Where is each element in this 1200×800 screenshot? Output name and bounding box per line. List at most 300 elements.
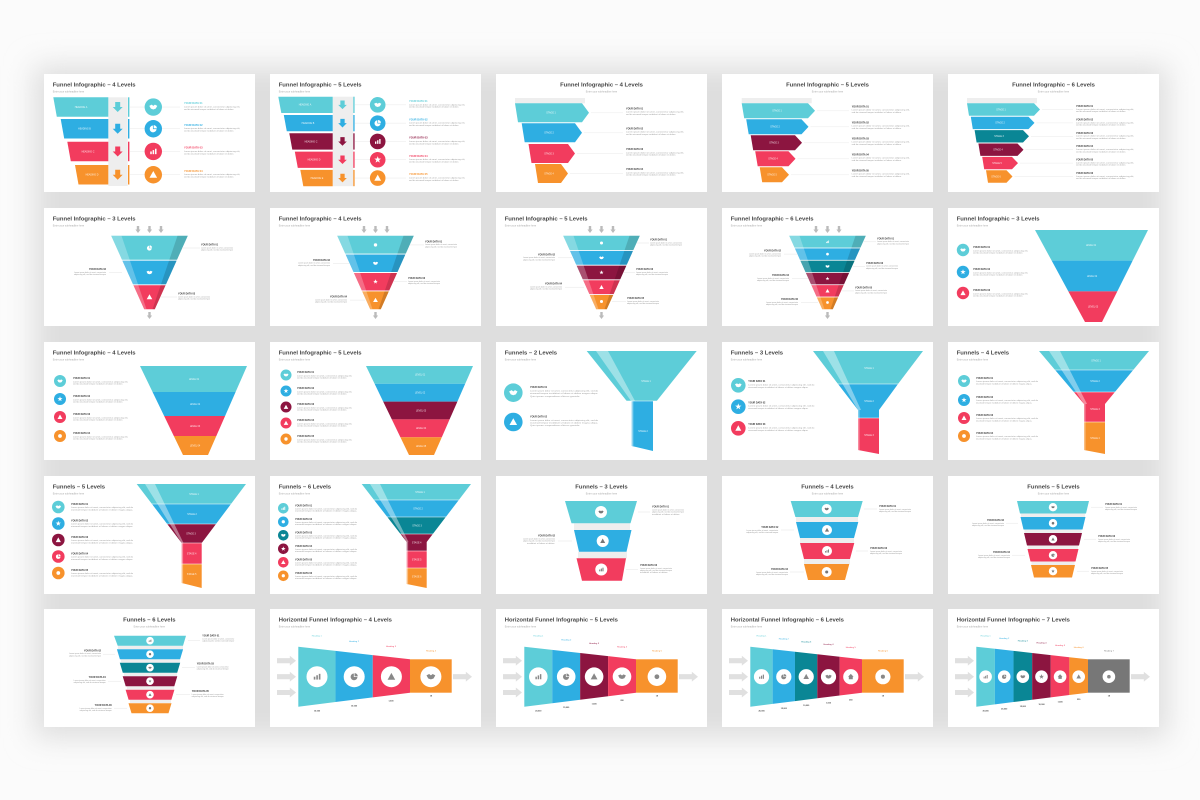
data labels: Lorem ipsum dolor sit amet, consectetur: [749, 252, 781, 255]
headings and values: Heading 2: [779, 638, 790, 640]
data items: sed do eiusmod tempor incididunt ut labore et dolore.: [184, 152, 235, 155]
list items: sed do eiusmod tempor incididunt ut labore et dolore.: [297, 441, 348, 444]
data items: YOUR DATA 03: [1076, 132, 1094, 135]
funnel bars: HEADING C: [82, 150, 95, 153]
data labels: adipiscing elit, sed do eiusmod tempor: [1091, 572, 1123, 575]
funnel bars: HEADING E: [311, 177, 324, 180]
list items: YOUR DATA 03: [973, 289, 991, 292]
headings and values: Heading 1: [757, 636, 767, 638]
data labels: [746, 505, 911, 576]
funnel: LEVEL 04: [416, 428, 427, 430]
list items: YOUR DATA 02: [748, 401, 766, 404]
list items: Lorem ipsum dolor sit amet, consectetur adipiscing elit,: [973, 292, 1029, 295]
subtitle: Enter your subheadline here: [586, 492, 618, 495]
list items: Lorem ipsum dolor sit amet, consectetur adipiscing elit, sed do: [71, 506, 133, 509]
data labels: YOUR DATA 05: [855, 286, 873, 289]
list items: [957, 244, 1029, 299]
data items: Lorem ipsum dolor sit amet, consectetur adipiscing elit,: [1076, 175, 1135, 178]
data labels: Lorem ipsum dolor sit amet, consectetur: [972, 522, 1004, 525]
data items: Lorem ipsum dolor sit amet, consectetur adipiscing elit,: [1076, 162, 1135, 164]
slide: Funnel Infographic 4 levels arrow bars: [496, 74, 707, 192]
funnel bars: HEADING A: [299, 104, 312, 107]
list items: Lorem ipsum dolor sit amet, consectetur adipiscing elit, sed do: [295, 521, 357, 524]
data items: sed do eiusmod tempor incididunt ut labore et dolore.: [409, 161, 460, 164]
data labels: Lorem ipsum dolor sit amet, consectetur: [80, 707, 112, 710]
funnel: STAGE 1: [1091, 360, 1101, 362]
title: Funnel Infographic – 5 Levels: [786, 83, 870, 89]
list items: sed do eiusmod tempor incididunt ut labore et dolore.: [297, 409, 348, 412]
headings and values: Heading 3: [801, 641, 812, 643]
list items: eiusmod tempor incididunt ut labore et dolore magna aliqua.: [976, 402, 1033, 405]
headings and values: Heading 7: [1104, 651, 1115, 653]
data labels: YOUR DATA 01: [879, 505, 897, 508]
data labels: adipiscing elit, sed do eiusmod tempor: [69, 654, 101, 657]
list items: YOUR DATA 01: [73, 377, 91, 380]
list items: sed do eiusmod tempor incididunt ut labore et dolore.: [297, 425, 348, 428]
list items: sed do eiusmod tempor incididunt ut labore et dolore.: [73, 401, 124, 404]
data labels: Lorem ipsum dolor sit amet, consectetur: [627, 300, 659, 303]
slide: list with funnel 3 levels: [948, 208, 1159, 326]
data items: Lorem ipsum dolor sit amet, consectetur adipiscing elit,: [184, 150, 241, 153]
slide: Horizontal Funnel 7 levels: [948, 609, 1159, 727]
slide: Funnel Infographic 4 levels with arrows: [44, 74, 255, 192]
slide: Funnels 3 levels: [722, 342, 933, 460]
data items: sed do eiusmod tempor incididunt ut labore et dolore.: [1076, 137, 1127, 140]
data labels: YOUR DATA 02: [764, 250, 782, 253]
subtitle: Enter your subheadline here: [134, 625, 166, 628]
headings and values: Heading 3: [1018, 640, 1029, 642]
list items: Lorem ipsum dolor sit amet, consectetur adipiscing elit, sed do: [71, 523, 133, 526]
data items: sed do eiusmod tempor incididunt ut labore et dolore.: [1076, 110, 1127, 113]
funnel arrow bars: [742, 98, 815, 182]
funnel: LEVEL 01: [415, 375, 426, 377]
list items: YOUR DATA 03: [976, 414, 994, 417]
funnel arrow bars: [967, 98, 1040, 183]
data labels: Lorem ipsum dolor sit amet, consectetur: [640, 567, 672, 570]
subtitle: Enter your subheadline here: [731, 224, 763, 227]
slide: Funnels 4 levels: [948, 342, 1159, 460]
list items: sed do eiusmod tempor incididunt ut labore et dolore.: [297, 393, 348, 396]
data items: Lorem ipsum dolor sit amet, consectetur adipiscing elit,: [626, 171, 685, 174]
data items: Lorem ipsum dolor sit amet, consectetur adipiscing elit,: [184, 127, 241, 130]
headings and values: 10,000: [803, 705, 810, 707]
data labels: YOUR DATA 02: [538, 535, 556, 538]
data labels: YOUR DATA 02: [987, 519, 1005, 522]
title: Horizontal Funnel Infographic – 5 Levels: [505, 618, 619, 624]
data labels: [298, 240, 457, 304]
title: Funnel Infographic – 3 Levels: [957, 217, 1040, 223]
data labels: adipiscing elit, sed do eiusmod tempor: [425, 245, 457, 248]
headings and values: 10,000: [1038, 704, 1045, 706]
funnel: STAGE 2: [638, 430, 648, 433]
data labels: YOUR DATA 02: [89, 268, 107, 271]
data items: YOUR DATA 04: [184, 169, 203, 173]
data labels: adipiscing elit, sed do eiusmod tempor: [523, 258, 555, 261]
subtitle: Enter your subheadline here: [279, 224, 311, 227]
data items: Lorem ipsum dolor sit amet, consectetur adipiscing elit,: [1076, 108, 1135, 111]
data labels: adipiscing elit, sed do eiusmod tempor: [877, 242, 909, 245]
list items: Lorem ipsum dolor sit amet, consectetur adipiscing elit, sed do: [295, 507, 357, 510]
data items: YOUR DATA 06: [1076, 172, 1094, 175]
data labels: YOUR DATA 02: [761, 526, 779, 529]
data labels: YOUR DATA 04: [330, 296, 348, 299]
data items: Lorem ipsum dolor sit amet, consectetur adipiscing elit,: [626, 151, 685, 154]
data items: sed do eiusmod tempor incididunt ut labore et dolore.: [184, 130, 235, 133]
data labels: Lorem ipsum dolor sit amet, consectetur: [1098, 538, 1130, 541]
headings and values: 25,000: [758, 711, 765, 713]
data labels: YOUR DATA 02: [313, 259, 331, 262]
data labels: Lorem ipsum dolor sit amet, consectetur: [1105, 506, 1137, 509]
data labels: adipiscing elit, sed do eiusmod tempor: [315, 301, 347, 304]
data labels: YOUR DATA 01: [650, 238, 668, 242]
list items: Lorem ipsum dolor sit amet, consectetur adipiscing elit, sed do: [976, 417, 1038, 420]
headings and values: Heading 5: [652, 651, 663, 653]
subtitle: Enter your subheadline here: [53, 224, 85, 227]
data items: sed do eiusmod tempor incididunt ut labore et dolore.: [1076, 177, 1127, 180]
data labels: YOUR DATA 02: [84, 649, 102, 652]
list items: Lorem ipsum dolor sit amet, consectetur adipiscing elit,: [297, 438, 353, 441]
funnel: LEVEL 01: [189, 379, 200, 381]
slide: Horizontal Funnel 6 levels: [722, 609, 933, 727]
funnel: [813, 351, 923, 454]
list items: Quis ipsum suspendisse ultrices gravida.: [530, 424, 581, 427]
list items: eiusmod tempor incididunt ut labore et dolore magna aliqua.: [530, 392, 599, 395]
data items: [791, 105, 910, 178]
funnel: LEVEL 03: [1088, 306, 1099, 308]
subtitle: Enter your subheadline here: [957, 358, 989, 361]
data labels: adipiscing elit, sed do eiusmod tempor: [766, 303, 798, 306]
data items: Lorem ipsum dolor sit amet, consectetur adipiscing elit,: [852, 173, 910, 176]
data labels: Lorem ipsum dolor sit amet, consectetur: [523, 256, 555, 259]
data labels: [74, 244, 233, 300]
list items: Lorem ipsum dolor sit amet, consectetur adipiscing elit,: [73, 435, 129, 438]
headings and values: Heading 6: [1074, 647, 1084, 649]
data items: YOUR DATA 03: [409, 136, 428, 140]
headings and values: 1,500: [388, 701, 394, 703]
funnel: [137, 484, 246, 588]
list items: Lorem ipsum dolor sit amet, consectetur adipiscing elit,: [73, 416, 129, 419]
slide: Funnels 5 levels: [44, 476, 255, 594]
data labels: incididunt ut labore et dolore.: [652, 513, 681, 516]
data labels: YOUR DATA 04: [772, 274, 790, 277]
funnel: LEVEL 03: [416, 410, 427, 412]
data items: [130, 98, 241, 183]
list items: sed do eiusmod tempor incididunt ut labore et dolore.: [973, 252, 1024, 255]
funnel arrow bars: STAGE 3: [544, 152, 554, 155]
list items: eiusmod tempor incididunt ut labore et dolore magna aliqua.: [295, 550, 358, 553]
data items: Lorem ipsum dolor sit amet, consectetur adipiscing elit,: [852, 125, 910, 128]
data labels: YOUR DATA 01: [652, 506, 670, 509]
data items: YOUR DATA 02: [852, 121, 869, 124]
funnel arrow bars: STAGE 3: [994, 135, 1004, 138]
funnel: LEVEL 02: [415, 392, 426, 394]
data labels: adipiscing elit, sed do eiusmod tempor: [197, 668, 229, 671]
data labels: Lorem ipsum dolor sit amet, consectetur: [530, 286, 562, 288]
data items: YOUR DATA 01: [409, 99, 428, 103]
slide: triangle funnel 4 levels: [270, 208, 481, 326]
subtitle: Enter your subheadline here: [505, 224, 537, 227]
headings and values: 18: [882, 696, 885, 698]
headings and values: Heading 2: [999, 638, 1010, 640]
headings and values: 15,000: [781, 708, 788, 710]
horizontal funnel: [750, 647, 904, 707]
data labels: Lorem ipsum dolor sit amet, consectetur: [74, 679, 106, 682]
subtitle: Enter your subheadline here: [1038, 90, 1070, 93]
data labels: Lorem ipsum dolor sit amet, consectetur: [523, 538, 555, 540]
subtitle: Enter your subheadline here: [279, 90, 311, 93]
headings and values: 15,000: [1020, 706, 1027, 708]
data items: YOUR DATA 02: [409, 117, 428, 121]
list items: YOUR DATA 04: [295, 545, 313, 548]
data labels: adipiscing elit, sed do eiusmod tempor: [80, 709, 112, 712]
headings and values: 1,500: [1058, 702, 1063, 704]
funnel: STAGE 2: [187, 513, 197, 516]
data items: YOUR DATA 03: [626, 148, 644, 151]
list items: YOUR DATA 01: [976, 377, 994, 380]
data labels: adipiscing elit, sed do eiusmod tempor: [202, 640, 235, 643]
funnel arrow bars: STAGE 5: [992, 162, 1002, 165]
funnel: STAGE 5: [187, 573, 197, 576]
list items: YOUR DATA 03: [73, 413, 91, 416]
subtitle: Enter your subheadline here: [53, 90, 85, 93]
triangle funnel: [556, 236, 646, 309]
slide: triangle funnel 3 levels: [44, 208, 255, 326]
data labels: Lorem ipsum dolor sit amet, consectetur: [74, 271, 106, 274]
data labels: Lorem ipsum dolor sit amet, consectetur: [870, 550, 902, 553]
funnel: [1035, 230, 1148, 322]
title: Funnel Infographic – 3 Levels: [53, 217, 136, 223]
data labels: Lorem ipsum dolor sit amet, consectetur: [298, 262, 330, 265]
title: Funnel Infographic – 6 Levels: [731, 217, 814, 223]
title: Funnel Infographic – 6 Levels: [1012, 83, 1096, 89]
title: Funnels – 5 Levels: [1027, 485, 1080, 491]
data labels: Lorem ipsum dolor sit amet, consectetur: [652, 508, 684, 512]
title: Funnel Infographic – 4 Levels: [560, 83, 644, 89]
input arrows: [729, 656, 924, 697]
title: Horizontal Funnel Infographic – 6 Levels: [731, 618, 845, 624]
list items: eiusmod tempor incididunt ut labore et dolore magna aliqua.: [530, 422, 599, 424]
data items: Lorem ipsum dolor sit amet, consectetur adipiscing elit,: [184, 173, 241, 176]
list items: eiusmod tempor incididunt ut labore et dolore magna aliqua.: [71, 525, 134, 528]
headings and values: 1,500: [826, 702, 832, 704]
data items: YOUR DATA 02: [1076, 118, 1094, 121]
data labels: YOUR DATA 06: [95, 704, 112, 707]
subtitle: Enter your subheadline here: [586, 90, 618, 93]
slide: stacked Funnels 5 levels: [948, 476, 1159, 594]
list items: Lorem ipsum dolor sit amet, consectetur adipiscing elit, sed do: [295, 534, 357, 537]
list items: [278, 503, 358, 581]
headings and values: [981, 636, 1115, 713]
funnel arrow bars: STAGE 1: [772, 110, 782, 113]
data labels: YOUR DATA 03: [866, 262, 884, 265]
title: Funnels – 6 Levels: [123, 618, 176, 624]
list items: YOUR DATA 04: [71, 552, 89, 556]
triangle funnel: [104, 236, 194, 309]
headings and values: Heading 5: [846, 647, 857, 649]
list items: Lorem ipsum dolor sit amet, consectetur adipiscing elit, sed do: [71, 539, 133, 542]
data labels: Lorem ipsum dolor sit amet, consectetur: [1091, 570, 1123, 573]
list items: eiusmod tempor incididunt ut labore et dolore magna aliqua.: [976, 383, 1033, 386]
data labels: YOUR DATA 03: [197, 663, 214, 666]
subtitle: Enter your subheadline here: [731, 625, 763, 628]
subtitle: Enter your subheadline here: [505, 625, 537, 628]
list items: [958, 375, 1038, 442]
headings and values: 1,500: [592, 704, 597, 706]
title: Funnel Infographic – 4 Levels: [279, 217, 362, 223]
data items: YOUR DATA 01: [184, 101, 203, 105]
list items: YOUR DATA 03: [297, 403, 315, 406]
data labels: adipiscing elit, sed do eiusmod tempor: [855, 291, 887, 294]
headings and values: Heading 1: [981, 636, 991, 638]
slide: Funnel Infographic 5 levels with arrows: [270, 74, 481, 192]
data labels: Lorem ipsum dolor sit amet, consectetur: [766, 301, 798, 304]
data labels: adipiscing elit, sed do eiusmod tempor: [746, 531, 779, 534]
list items: Lorem ipsum dolor sit amet, consectetur adipiscing elit, sed do: [71, 556, 133, 559]
data labels: YOUR DATA 03: [408, 277, 426, 280]
data labels: Lorem ipsum dolor sit amet, consectetur: [879, 508, 911, 511]
subtitle: Enter your subheadline here: [812, 492, 844, 495]
funnel: [587, 351, 697, 451]
headings and values: [757, 636, 889, 713]
data items: sed do eiusmod tempor incididunt ut labore et dolore.: [1076, 124, 1127, 126]
title: Funnel Infographic – 5 Levels: [279, 351, 362, 357]
subtitle: Enter your subheadline here: [279, 492, 311, 495]
data labels: YOUR DATA 05: [192, 690, 209, 693]
data labels: Lorem ipsum dolor sit amet, consectetur: [746, 529, 779, 532]
stacked funnel: [791, 501, 863, 580]
funnel: STAGE 4: [1090, 437, 1100, 440]
title: Horizontal Funnel Infographic – 7 Levels: [957, 618, 1071, 624]
list items: YOUR DATA 01: [748, 380, 766, 383]
headings and values: Heading 6: [878, 651, 889, 653]
list items: Lorem ipsum dolor sit amet, consectetur adipiscing elit, sed do: [71, 572, 133, 575]
list items: eiusmod tempor incididunt ut labore et dolore magna aliqua.: [295, 523, 358, 526]
funnel arrow bars: STAGE 4: [768, 158, 778, 161]
list items: YOUR DATA 01: [973, 246, 991, 249]
funnel: LEVEL 02: [190, 404, 201, 406]
data items: sed do eiusmod tempor incididunt ut labore et dolore.: [409, 179, 460, 182]
input arrows: [955, 656, 1150, 697]
list items: Lorem ipsum dolor sit amet, consectetur adipiscing elit,: [973, 249, 1029, 252]
subtitle: Enter your subheadline here: [957, 224, 989, 227]
data labels: YOUR DATA 03: [636, 268, 654, 271]
data labels: Lorem ipsum dolor sit amet, consectetur: [315, 298, 347, 301]
list items: YOUR DATA 04: [73, 432, 91, 435]
slide: triangle funnel 5 levels: [496, 208, 707, 326]
data labels: YOUR DATA 04: [545, 283, 563, 286]
data labels: adipiscing elit, sed do eiusmod tempor: [74, 273, 106, 276]
headings and values: Heading 4: [824, 644, 834, 646]
funnel bars: HEADING C: [305, 140, 318, 143]
data items: sed do eiusmod tempor incididunt ut labore et dolore.: [626, 154, 677, 157]
data labels: Lorem ipsum dolor sit amet, consectetur: [636, 271, 668, 274]
data labels: YOUR DATA 03: [870, 547, 888, 550]
list items: Lorem ipsum dolor sit amet, consectetur adipiscing elit, sed do: [976, 380, 1038, 383]
data items: Lorem ipsum dolor sit amet, consectetur adipiscing elit,: [852, 157, 910, 160]
list items: Lorem ipsum dolor sit amet, consectetur adipiscing elit,: [973, 271, 1029, 274]
subtitle: Enter your subheadline here: [279, 625, 311, 628]
data items: sed do eiusmod tempor incididunt ut labore et dolore.: [852, 159, 902, 162]
data labels: [523, 238, 682, 305]
funnel: STAGE 1: [864, 367, 874, 370]
data labels: adipiscing elit, sed do eiusmod tempor: [879, 510, 911, 513]
subtitle: Enter your subheadline here: [812, 90, 844, 93]
funnel arrow bars: STAGE 2: [770, 126, 780, 129]
funnel: STAGE 1: [641, 380, 651, 383]
slide: triangle funnel 6 levels: [722, 208, 933, 326]
list items: Quis ipsum suspendisse ultrices gravida.: [530, 395, 581, 398]
funnel bars: HEADING B: [302, 122, 315, 125]
data labels: adipiscing elit, sed do eiusmod tempor: [978, 556, 1010, 559]
subtitle: Enter your subheadline here: [53, 492, 85, 495]
subtitle: Enter your subheadline here: [505, 358, 537, 361]
data labels: YOUR DATA 03: [1098, 535, 1116, 538]
data labels: adipiscing elit, sed do eiusmod tempor: [627, 302, 659, 305]
data items: [1014, 105, 1135, 180]
list items: [731, 378, 814, 436]
stacked funnel: [1017, 501, 1089, 578]
title: Funnel Infographic – 4 Levels: [53, 83, 136, 89]
headings and values: 10,000: [351, 706, 358, 708]
title: Funnel Infographic – 5 Levels: [279, 83, 362, 89]
funnel: STAGE 5: [412, 558, 422, 562]
horizontal funnel: [976, 647, 1130, 707]
data items: YOUR DATA 05: [1076, 159, 1094, 162]
data items: Lorem ipsum dolor sit amet, consectetur adipiscing elit,: [852, 141, 910, 144]
list items: sed do eiusmod tempor incididunt ut labore et dolore.: [297, 377, 348, 380]
data labels: YOUR DATA 04: [993, 551, 1011, 554]
headings and values: 30,000: [983, 711, 990, 713]
funnel arrow bars: STAGE 3: [769, 142, 779, 145]
data items: YOUR DATA 02: [184, 123, 203, 127]
stacked funnel: [565, 501, 637, 581]
slide: Funnel Infographic 5 levels arrow bars: [722, 74, 933, 192]
data labels: YOUR DATA 04: [89, 676, 106, 679]
data labels: Lorem ipsum dolor sit amet, consectetur: [408, 280, 440, 283]
headings and values: Heading 2: [561, 640, 572, 642]
headings and values: 250: [849, 700, 853, 702]
list items: YOUR DATA 02: [530, 415, 548, 418]
list items: Lorem ipsum dolor sit amet, consectetur adipiscing elit, sed do: [748, 426, 814, 429]
data labels: adipiscing elit, sed do eiusmod tempor: [636, 273, 668, 276]
list items: Lorem ipsum dolor sit amet, consectetur adipiscing elit, sed do: [295, 561, 357, 564]
headings and values: Heading 3: [386, 646, 397, 648]
list items: sed do eiusmod tempor incididunt ut labore et dolore.: [973, 295, 1024, 298]
funnel arrow bars: STAGE 4: [993, 148, 1003, 152]
title: Funnels – 2 Levels: [505, 351, 558, 357]
data labels: YOUR DATA 04: [771, 568, 789, 571]
headings and values: Heading 5: [1055, 645, 1066, 647]
list items: Lorem ipsum dolor sit amet, consectetur adipiscing elit, sed do: [295, 575, 357, 578]
subtitle: Enter your subheadline here: [53, 358, 85, 361]
list items: Lorem ipsum dolor sit amet, consectetur adipiscing elit,: [73, 380, 129, 383]
data labels: adipiscing elit, sed do eiusmod tempor: [972, 524, 1004, 527]
funnel: STAGE 1: [415, 491, 425, 494]
headings and values: 15,000: [314, 711, 321, 713]
data labels: YOUR DATA 03: [640, 564, 658, 567]
funnel: STAGE 3: [1090, 408, 1100, 411]
list items: [54, 375, 129, 442]
data labels: YOUR DATA 06: [781, 298, 799, 301]
data items: sed do eiusmod tempor incididunt ut labore et dolore.: [409, 142, 460, 145]
funnel: [362, 484, 471, 588]
data labels: adipiscing elit, sed do eiusmod tempor: [298, 264, 330, 267]
data items: [570, 107, 685, 177]
headings and values: Heading 4: [426, 651, 437, 653]
list items: Lorem ipsum dolor sit amet, consectetur adipiscing elit, sed do: [976, 399, 1038, 402]
data items: YOUR DATA 03: [184, 145, 203, 149]
title: Funnels – 4 Levels: [801, 485, 854, 491]
